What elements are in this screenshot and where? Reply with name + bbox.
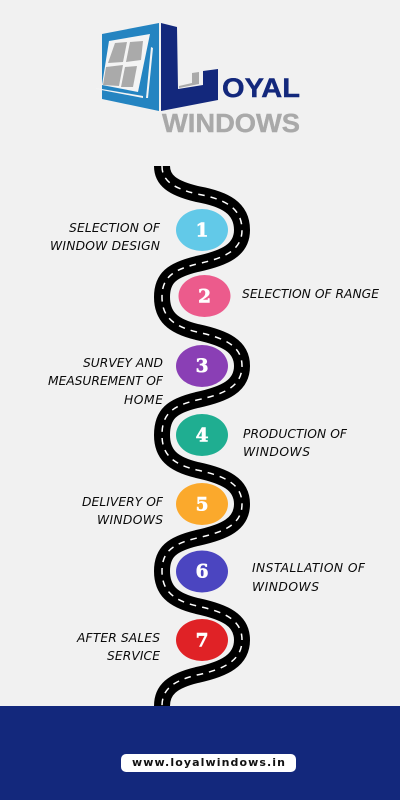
step 7 [76, 619, 228, 663]
label 7: AFTER SALES [76, 631, 160, 645]
icon: window frame [102, 23, 159, 111]
step 6: 6 [196, 562, 208, 582]
step 4: 4 [196, 426, 209, 446]
step 5 [82, 483, 228, 527]
step 4 [176, 414, 348, 459]
step 2: 2 [198, 286, 211, 308]
label 3: SURVEY AND [83, 356, 163, 370]
label 7: SERVICE [107, 649, 160, 663]
step 3 [48, 345, 228, 407]
logo text: OYAL: OYAL [222, 73, 300, 103]
logo text: WINDOWS: WINDOWS [162, 108, 300, 138]
logo [96, 23, 300, 138]
step 1: 1 [196, 220, 208, 242]
label 6: WINDOWS [252, 580, 319, 594]
label 4: WINDOWS [243, 445, 310, 459]
step 7: 7 [196, 630, 208, 652]
website url: www.loyalwindows.in [132, 756, 285, 769]
label 4: PRODUCTION OF [243, 427, 348, 441]
label 5: DELIVERY OF [82, 495, 164, 509]
step 6 [176, 550, 366, 594]
label 6: INSTALLATION OF [252, 561, 366, 575]
label 1: SELECTION OF [69, 221, 161, 235]
label 1: WINDOW DESIGN [50, 239, 160, 253]
label 2: SELECTION OF RANGE [242, 287, 379, 301]
step 2 [178, 275, 379, 317]
icon: grey sill [179, 72, 199, 88]
winding road [162, 166, 242, 706]
step 5: 5 [196, 494, 208, 516]
label 5: WINDOWS [97, 513, 163, 527]
step 3: 3 [196, 356, 208, 377]
icon: letter L [161, 23, 218, 111]
icon: open window sash [96, 34, 153, 98]
label 3: HOME [124, 393, 163, 407]
website pill [121, 754, 296, 772]
step 1 [50, 209, 228, 253]
label 3: MEASUREMENT OF [48, 374, 164, 388]
footer band [0, 706, 400, 800]
